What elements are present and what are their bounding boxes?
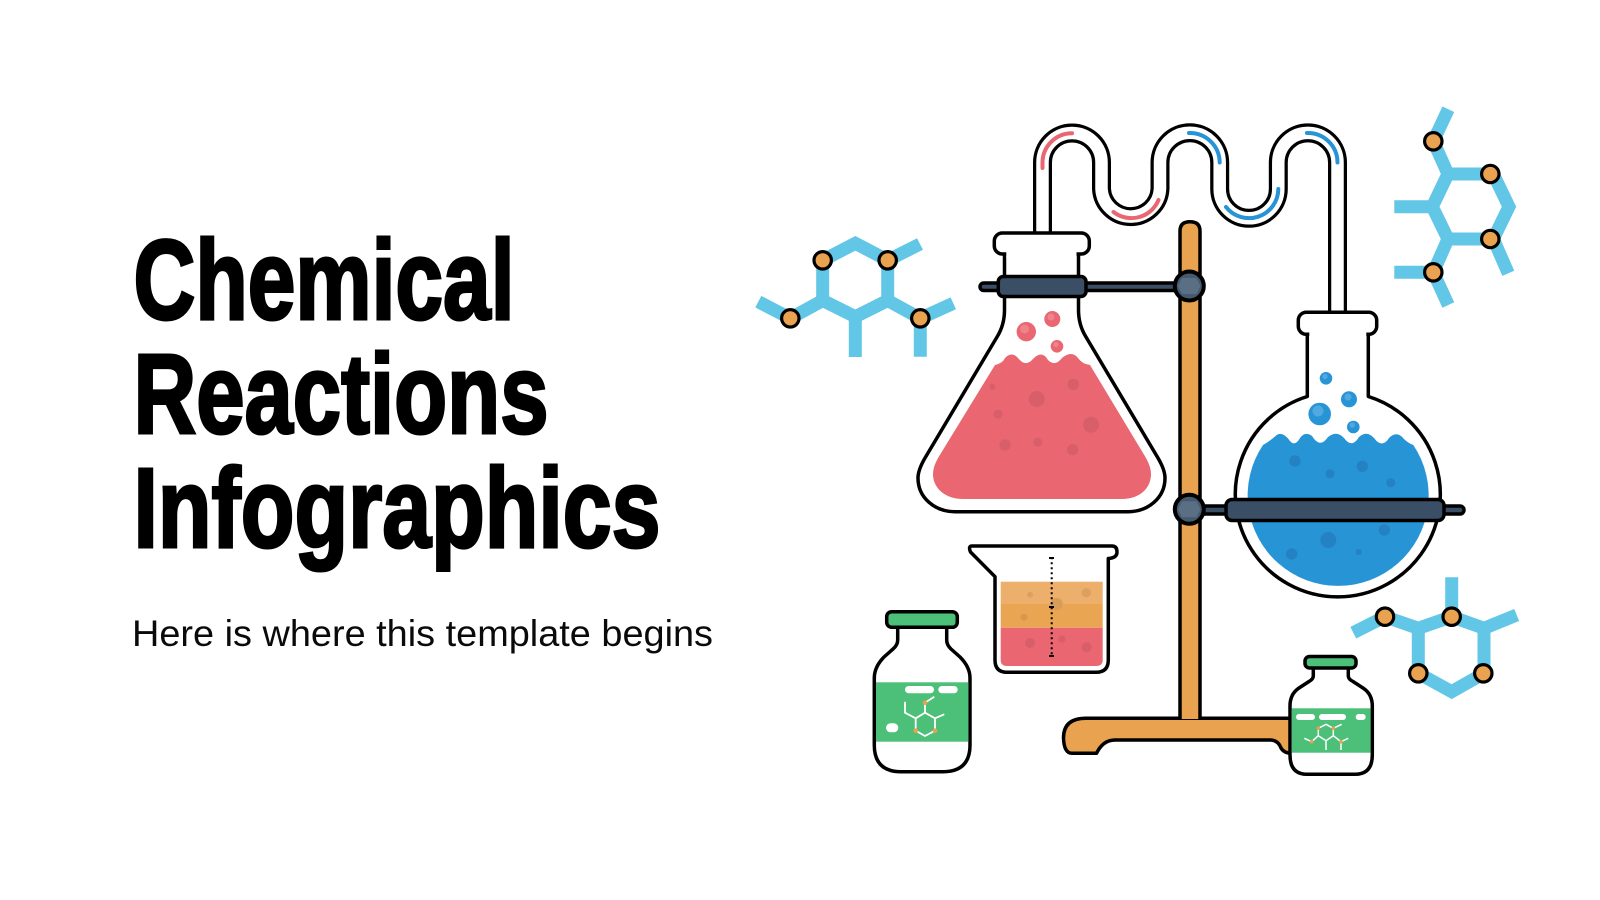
connecting glass tube [1042, 133, 1338, 318]
liquid spots [1286, 455, 1395, 560]
title [134, 217, 660, 571]
lower clamp [1195, 500, 1464, 520]
beaker [970, 546, 1117, 672]
bubbles [1308, 372, 1360, 433]
red conical flask [918, 233, 1165, 512]
flask liquid [1248, 434, 1429, 586]
bottle cap [1305, 656, 1356, 668]
left bottle [874, 612, 970, 772]
upper clamp joint [1175, 272, 1204, 300]
title: Infographics [134, 445, 660, 571]
icon: left molecule [758, 243, 953, 357]
flask lip [994, 233, 1089, 254]
upper clamp [980, 276, 1180, 296]
stand pole [1180, 222, 1200, 719]
bottle label [1292, 708, 1371, 753]
bottle label [876, 682, 968, 742]
flask lip [1298, 312, 1377, 334]
title: Reactions [134, 331, 548, 457]
icon: bottom right molecule [1353, 577, 1517, 692]
bottle cap [887, 612, 957, 627]
label pills [886, 686, 958, 732]
liquid layers [1001, 582, 1103, 604]
blue round flask [1235, 312, 1440, 597]
liquid spots [989, 379, 1099, 455]
measuring scale [1049, 557, 1054, 656]
label pills [1296, 714, 1366, 720]
label molecule [905, 697, 944, 736]
bubbles [1017, 311, 1063, 353]
right bottle [1290, 656, 1372, 774]
layer spots [1020, 588, 1092, 652]
subtitle: Here is where this template begins [132, 613, 713, 654]
lower clamp joint [1175, 495, 1204, 524]
label molecule [1304, 724, 1348, 750]
icon: top right molecule [1394, 109, 1509, 305]
stand base [1064, 718, 1292, 753]
flask liquid [933, 354, 1151, 499]
title: Chemical [134, 217, 514, 343]
